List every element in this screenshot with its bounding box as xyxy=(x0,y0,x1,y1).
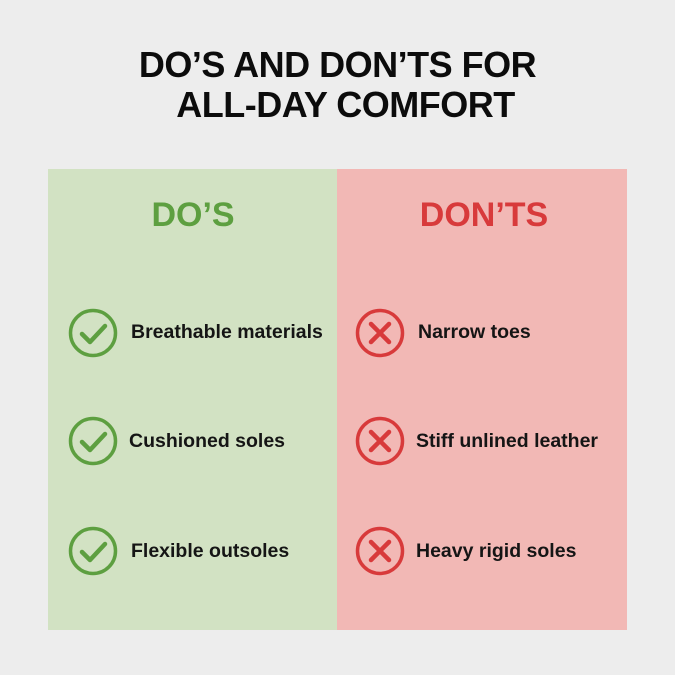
icon: x 3 xyxy=(356,526,404,576)
text: heavy: Heavy rigid soles xyxy=(416,540,576,562)
icon: check 2 xyxy=(68,416,118,466)
text: cushioned: Cushioned soles xyxy=(129,430,285,452)
panel: don'ts xyxy=(337,169,627,630)
text: narrow: Narrow toes xyxy=(418,321,531,343)
icon: x 2 xyxy=(356,416,404,466)
text: breathable: Breathable materials xyxy=(131,321,323,343)
icon: x 1 xyxy=(356,308,404,358)
text: stiff: Stiff unlined leather xyxy=(416,430,598,452)
heading: do's: DO’S xyxy=(151,196,235,234)
heading: don'ts: DON’TS xyxy=(420,196,548,234)
title xyxy=(139,44,536,125)
title: ALL-DAY COMFORT xyxy=(176,84,515,125)
icon: check 1 xyxy=(68,308,118,358)
panel: do's xyxy=(48,169,337,630)
text: flexible: Flexible outsoles xyxy=(131,540,289,562)
icon: check 3 xyxy=(68,526,118,576)
title: DO’S AND DON’TS FOR xyxy=(139,44,536,85)
